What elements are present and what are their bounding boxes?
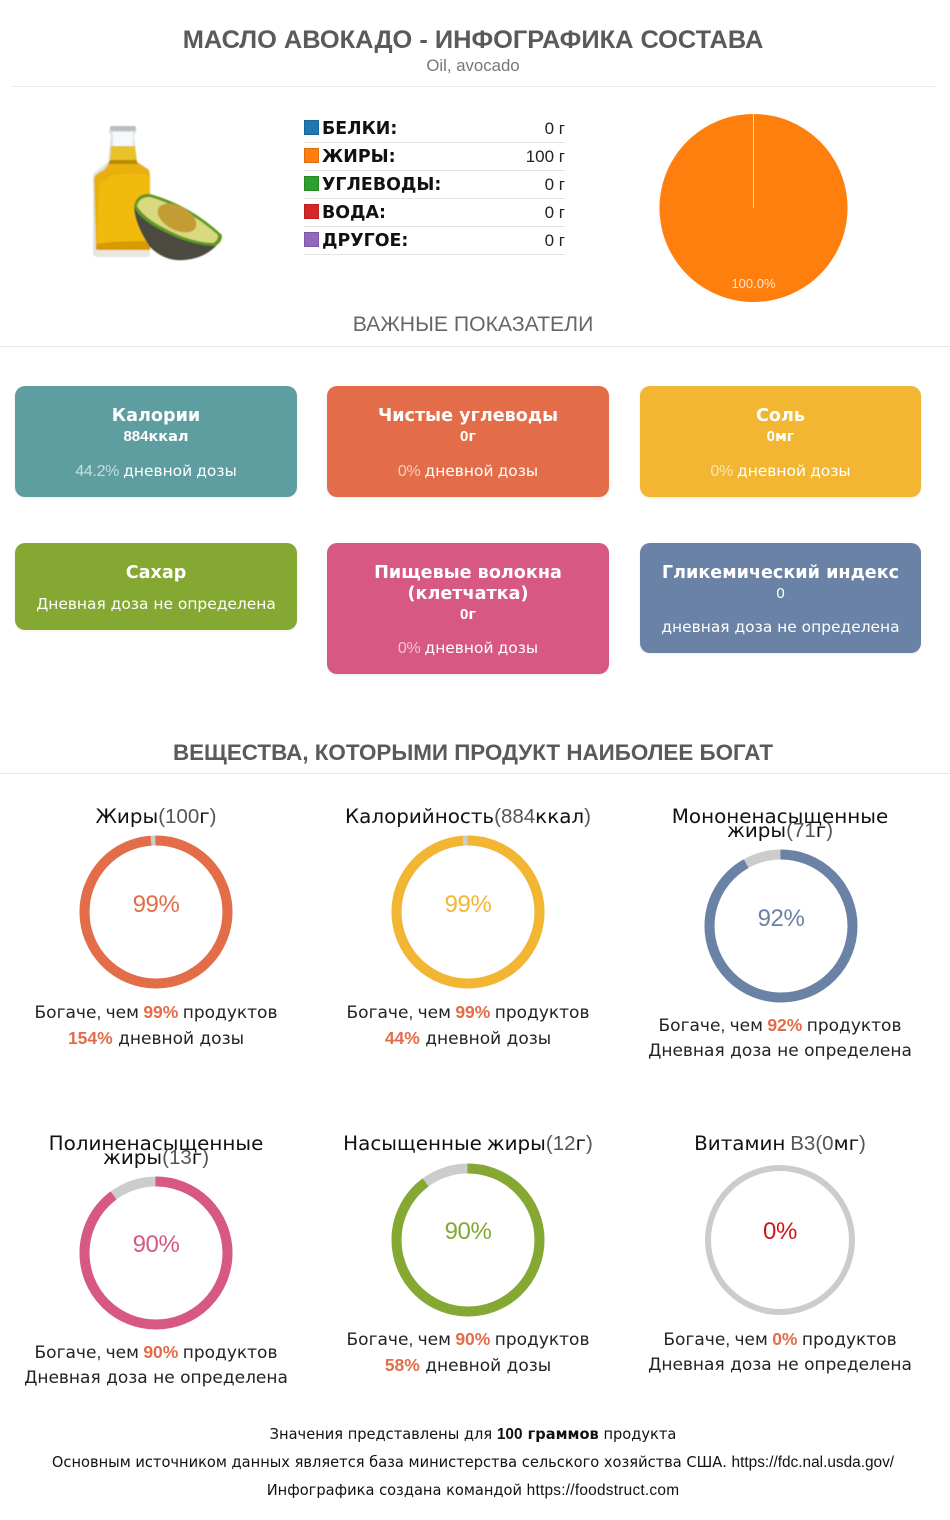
heading: Мононенасыщенные: [672, 805, 888, 828]
legend row: other: ДРУГОЕ:: [322, 231, 408, 251]
legend row: protein: БЕЛКИ:: [322, 119, 397, 139]
legend row: other: 0 г: [545, 231, 565, 250]
heading: [49, 1132, 263, 1169]
section heading: key indicators: ВАЖНЫЕ ПОКАЗАТЕЛИ: [353, 313, 593, 336]
daily dose: Дневная доза не определена: [648, 1355, 912, 1375]
card: net carbs: Чистые углеводы: [378, 406, 558, 426]
card: salt: [640, 386, 921, 497]
caption: Богаче, чем 90% продуктов: [347, 1329, 589, 1350]
card: salt: 0% дневной дозы: [710, 462, 851, 480]
card: sugar: [15, 543, 297, 630]
ring chart: [392, 836, 544, 988]
card: net carbs: [327, 386, 609, 497]
legend row: water: [304, 198, 565, 227]
heading: Жиры(100г): [96, 805, 216, 828]
caption: Богаче, чем 99% продуктов: [35, 1002, 277, 1023]
card: calories: 884ккал: [123, 428, 189, 445]
ring chart: [704, 850, 858, 1002]
card: fiber: 0% дневной дозы: [398, 639, 538, 657]
ring chart: 99%: [133, 891, 179, 918]
ring chart: [80, 1176, 232, 1330]
heading: Полиненасыщенные: [49, 1132, 263, 1155]
legend row: fat: 100 г: [526, 147, 565, 166]
card: net carbs: 0% дневной дозы: [398, 462, 538, 480]
ring chart: 92%: [758, 905, 804, 932]
card: net carbs: 0г: [460, 428, 476, 445]
daily dose: 154% дневной дозы: [68, 1028, 244, 1049]
pie chart: 100.0%: [731, 276, 776, 291]
daily dose: Дневная доза не определена: [24, 1368, 288, 1388]
icon: oil bottle and avocado: [92, 126, 223, 262]
footer notes: [52, 1426, 894, 1499]
card: calories: Калории: [112, 406, 200, 426]
legend row: fat: ЖИРЫ:: [322, 147, 396, 167]
card: sugar: Дневная доза не определена: [36, 595, 276, 613]
card: sugar: Сахар: [126, 563, 186, 583]
card: calories: [15, 386, 297, 497]
legend row: protein: 0 г: [545, 119, 565, 138]
ring chart: [392, 1164, 544, 1316]
legend row: carbs: 0 г: [545, 175, 565, 194]
ring chart: 99%: [445, 891, 491, 918]
daily dose: Дневная доза не определена: [648, 1041, 912, 1061]
nutrient: calories: [345, 805, 591, 1049]
card: glycemic index: 0: [776, 585, 785, 602]
daily dose: 58% дневной дозы: [385, 1355, 551, 1376]
caption: Богаче, чем 99% продуктов: [347, 1002, 589, 1023]
note: data source: Основным источником данных является база министерства сельского хозяйства США. https://fdc.nal.usda.gov/: [52, 1454, 894, 1471]
legend row: water: 0 г: [545, 203, 565, 222]
legend row: carbs: [304, 170, 565, 199]
legend row: water: ВОДА:: [322, 203, 386, 223]
heading: Насыщенные жиры(12г): [343, 1132, 593, 1155]
title: МАСЛО АВОКАДО - ИНФОГРАФИКА СОСТАВА: [183, 26, 763, 54]
nutrient: vitamin B3: [648, 1132, 912, 1375]
ring chart: [80, 836, 232, 988]
note: serving size: Значения представлены для 100 граммов продукта: [270, 1426, 676, 1443]
card: calories: 44.2% дневной дозы: [75, 462, 237, 480]
ring chart: 90%: [445, 1218, 491, 1245]
section heading: richest nutrients: ВЕЩЕСТВА, КОТОРЫМИ ПРОДУКТ НАИБОЛЕЕ БОГАТ: [173, 740, 773, 765]
nutrient: saturated fat: [343, 1132, 593, 1376]
ring chart: [705, 1165, 855, 1315]
card: glycemic index: [640, 543, 921, 653]
heading: жиры(13г): [103, 1146, 209, 1169]
caption: Богаче, чем 90% продуктов: [35, 1342, 277, 1363]
heading: жиры(71г): [727, 819, 833, 842]
legend table: [304, 119, 565, 255]
heading: Витамин B3(0мг): [694, 1132, 866, 1155]
legend row: other: [304, 226, 565, 255]
card: glycemic index: дневная доза не определена: [661, 618, 900, 636]
card: fiber: (клетчатка): [408, 584, 528, 604]
card: salt: Соль: [756, 406, 805, 426]
card: salt: 0мг: [767, 428, 794, 445]
card: fiber: 0г: [460, 606, 476, 623]
caption: Богаче, чем 92% продуктов: [659, 1015, 901, 1036]
nutrient: polyunsaturated fat: [24, 1132, 288, 1388]
daily dose: 44% дневной дозы: [385, 1028, 551, 1049]
legend row: protein: [304, 114, 565, 143]
nutrient: monounsaturated fat: [648, 805, 912, 1061]
note: credits: Инфографика создана командой https://foodstruct.com: [267, 1482, 679, 1499]
ring chart: 0%: [763, 1218, 797, 1245]
legend row: carbs: УГЛЕВОДЫ:: [322, 175, 441, 195]
caption: Богаче, чем 0% продуктов: [663, 1329, 897, 1350]
card: glycemic index: Гликемический индекс: [662, 563, 899, 583]
heading: Калорийность(884ккал): [345, 805, 591, 828]
pie chart: [660, 114, 848, 302]
card: fiber: [327, 543, 609, 674]
subtitle: Oil, avocado: [426, 56, 520, 75]
card: fiber: Пищевые волокна: [374, 563, 562, 583]
nutrient: fat: [35, 805, 277, 1049]
heading: [672, 805, 888, 842]
ring chart: 90%: [133, 1231, 179, 1258]
legend row: fat: [304, 142, 565, 171]
